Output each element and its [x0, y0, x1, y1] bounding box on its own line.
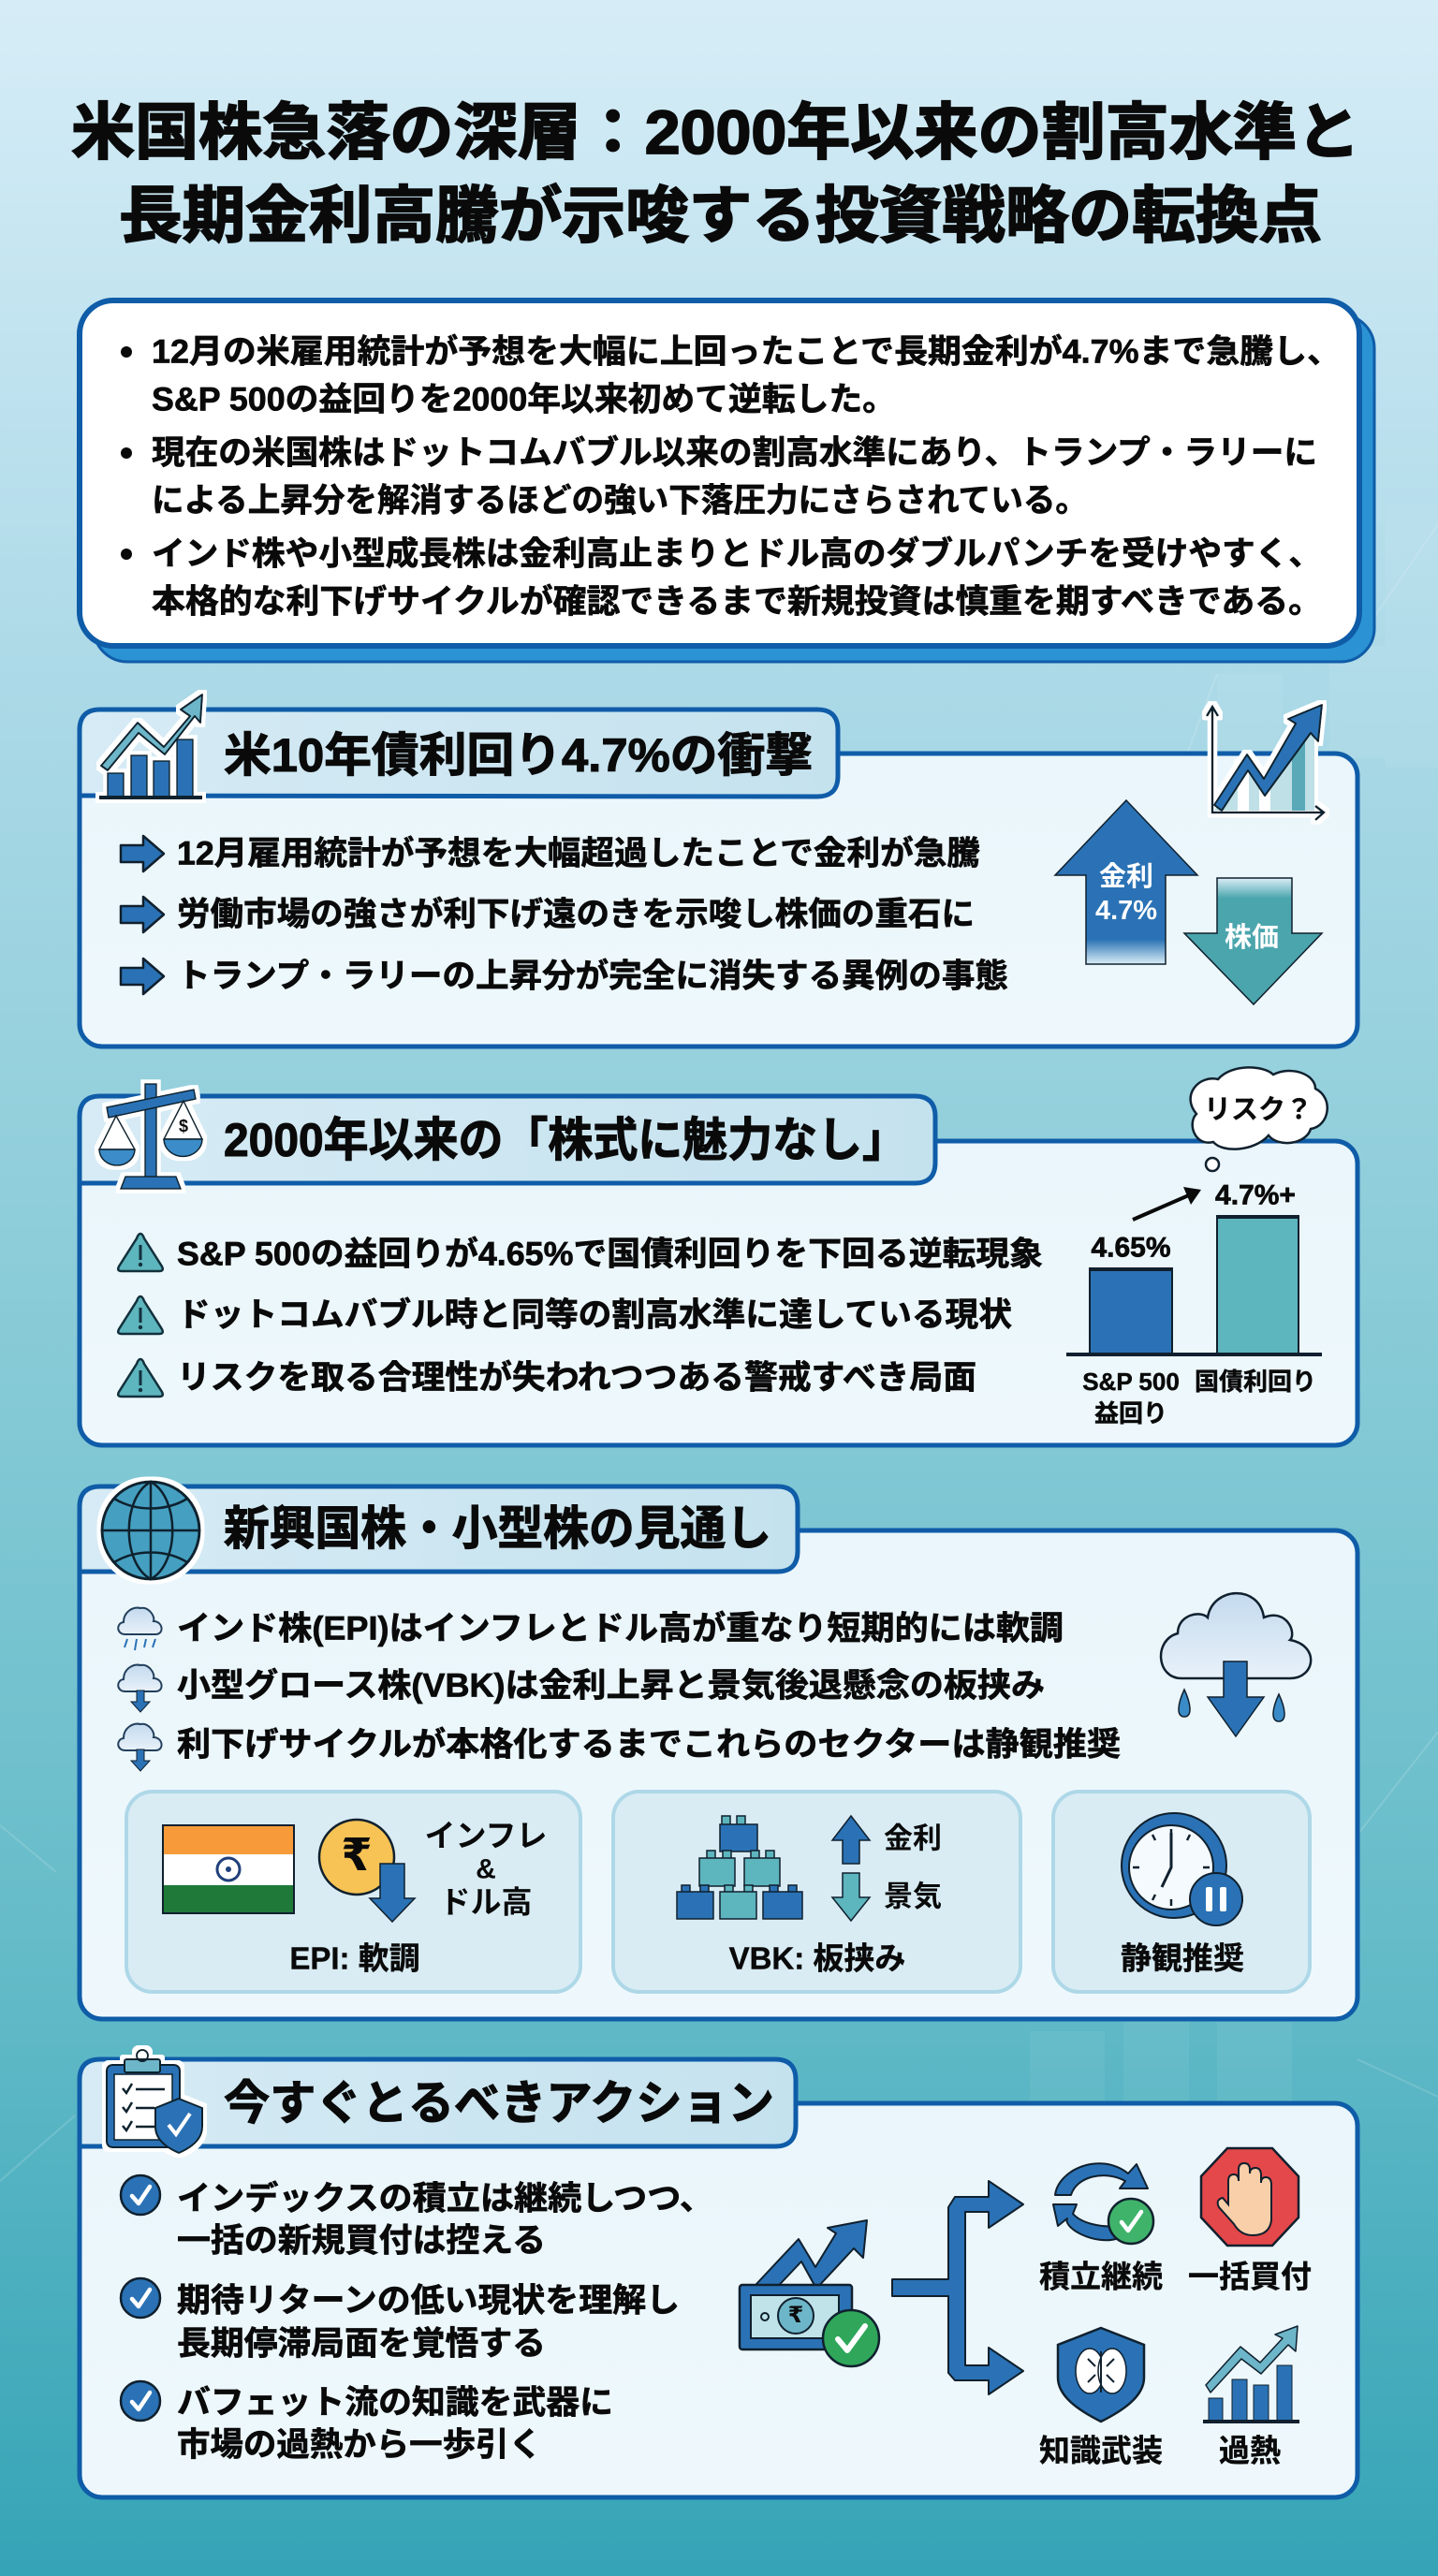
inflation and dollar strength label: & [476, 1853, 496, 1885]
icon: stop hand [1201, 2148, 1299, 2246]
bar chart: yields: S&P 500 [1082, 1368, 1180, 1396]
summary bullet points: インド株や小型成長株は金利高止まりとドル高のダブルパンチを受けやすく、 [152, 535, 1322, 573]
arrow: interest rate up: 金利 [1099, 861, 1153, 892]
icon: falling rupee: ₹ [341, 1829, 373, 1881]
action checklist: インデックスの積立は継続しつつ、 [177, 2179, 713, 2217]
summary bullet points: 本格的な利下げサイクルが確認できるまで新規投資は慎重を期すべきである。 [152, 584, 1322, 620]
bullet list [118, 1608, 1121, 1771]
bar chart: yields: 4.65% [1091, 1232, 1171, 1264]
inflation and dollar strength label: インフレ [424, 1818, 548, 1853]
icon: banknote with growth arrow: ₹ [788, 2302, 803, 2328]
icon: stacked blocks [677, 1816, 802, 1919]
action checklist: 市場の過熱から一歩引く [177, 2426, 542, 2464]
warning list [118, 1234, 1043, 1397]
panel: 10-year yield shock [80, 695, 1357, 1046]
heading: 米10年債利回り4.7%の衝撃 [224, 729, 813, 782]
action checklist: 長期停滞局面を覚悟する [177, 2325, 546, 2363]
title: 長期金利高騰が示唆する投資戦略の転換点 [119, 181, 1322, 250]
bullet list: トランプ・ラリーの上昇分が完全に消失する異例の事態 [177, 959, 1008, 994]
heading [80, 710, 838, 797]
inflation and dollar strength label [424, 1818, 548, 1919]
icon: banknote with growth arrow [740, 2220, 879, 2366]
icon: rising bar chart [99, 695, 202, 799]
title [71, 97, 1360, 250]
inflation and dollar strength label: ドル高 [440, 1885, 532, 1919]
icon: knowledge shield [1058, 2328, 1144, 2422]
bar chart: yields [1066, 1179, 1322, 1427]
card: wait and see [1053, 1792, 1310, 1992]
icon: overheating chart [1203, 2326, 1299, 2423]
icon: India flag [163, 1825, 294, 1913]
card: wait and see: 静観推奨 [1121, 1941, 1244, 1975]
card: EPI [126, 1792, 580, 1992]
action checklist [121, 2175, 713, 2464]
card: VBK: VBK: 板挟み [729, 1941, 905, 1975]
bar chart: yields: 4.7%+ [1215, 1179, 1296, 1211]
label: 一括買付 [1188, 2260, 1312, 2293]
summary bullet points: S&P 500の益回りを2000年以来初めて逆転した。 [152, 382, 896, 417]
rate and economy labels: 景気 [884, 1880, 942, 1913]
warning list: ドットコムバブル時と同等の割高水準に達している現状 [177, 1295, 1012, 1333]
arrow: stock price down [1184, 878, 1322, 1004]
icon: line chart [1207, 705, 1324, 820]
arrow: branching [892, 2181, 1023, 2394]
summary bullet points: 現在の米国株はドットコムバブル以来の割高水準にあり、トランプ・ラリーに [152, 434, 1317, 472]
summary bullet points: 12月の米雇用統計が予想を大幅に上回ったことで長期金利が4.7%まで急騰し、 [152, 333, 1341, 371]
bullet list: インド株(EPI)はインフレとドル高が重なり短期的には軟調 [177, 1610, 1064, 1647]
label: 過熱 [1219, 2434, 1281, 2467]
bar chart: yields: 益回り [1094, 1399, 1167, 1427]
rate and economy labels: 金利 [884, 1822, 942, 1855]
arrow: interest rate up: 4.7% [1095, 896, 1157, 926]
icon: rain cloud with down arrow [1161, 1593, 1311, 1736]
heading [80, 1486, 798, 1572]
icon: checklist clipboard and shield [107, 2050, 202, 2153]
icon: clock with pause [1122, 1813, 1242, 1925]
icon: balance scale [99, 1084, 202, 1189]
heading [80, 1096, 935, 1183]
callout: risk thought bubble [1191, 1067, 1328, 1171]
up and down arrows [832, 1816, 870, 1921]
bullet list [121, 835, 1008, 994]
heading: 今すぐとるべきアクション [224, 2077, 774, 2130]
card: VBK [613, 1792, 1020, 1992]
panel: emerging and small cap outlook [80, 1482, 1357, 2019]
bullet list: 労働市場の強さが利下げ遠のきを示唆し株価の重石に [177, 897, 975, 932]
panel: summary [80, 300, 1374, 662]
heading: 新興国株・小型株の見通し [224, 1502, 771, 1555]
label: 知識武装 [1039, 2434, 1163, 2467]
action checklist: 期待リターンの低い現状を理解し [177, 2282, 680, 2320]
panel: no appeal since 2000 [80, 1067, 1357, 1445]
summary bullet points: による上昇分を解消するほどの強い下落圧力にさらされている。 [152, 483, 1088, 519]
icon: globe [102, 1482, 199, 1579]
action checklist: 一括の新規買付は控える [177, 2222, 546, 2260]
callout: risk thought bubble: リスク？ [1204, 1095, 1313, 1125]
summary bullet points [121, 333, 1341, 620]
action checklist: バフェット流の知識を武器に [177, 2385, 613, 2421]
bullet list: 利下げサイクルが本格化するまでこれらのセクターは静観推奨 [177, 1726, 1121, 1764]
card: EPI: EPI: 軟調 [289, 1941, 420, 1975]
arrow: stock price down: 株価 [1225, 922, 1279, 953]
bar chart: yields: 国債利回り [1195, 1368, 1316, 1396]
heading [80, 2059, 796, 2146]
title: 米国株急落の深層：2000年以来の割高水準と [71, 97, 1360, 167]
bullet list: 小型グロース株(VBK)は金利上昇と景気後退懸念の板挟み [177, 1668, 1045, 1704]
arrow: interest rate up [1055, 800, 1197, 964]
panel: actions [80, 2050, 1357, 2497]
icon: continue investing [1053, 2163, 1153, 2244]
heading: 2000年以来の「株式に魅力なし」 [224, 1114, 907, 1166]
bullet list: 12月雇用統計が予想を大幅超過したことで金利が急騰 [177, 835, 980, 872]
rate and economy labels [884, 1822, 942, 1913]
label: 積立継続 [1039, 2260, 1163, 2293]
warning list: リスクを取る合理性が失われつつある警戒すべき局面 [177, 1359, 976, 1397]
icon: balance scale: $ [179, 1117, 188, 1135]
icon: falling rupee [319, 1820, 415, 1922]
warning list: S&P 500の益回りが4.65%で国債利回りを下回る逆転現象 [177, 1236, 1043, 1273]
